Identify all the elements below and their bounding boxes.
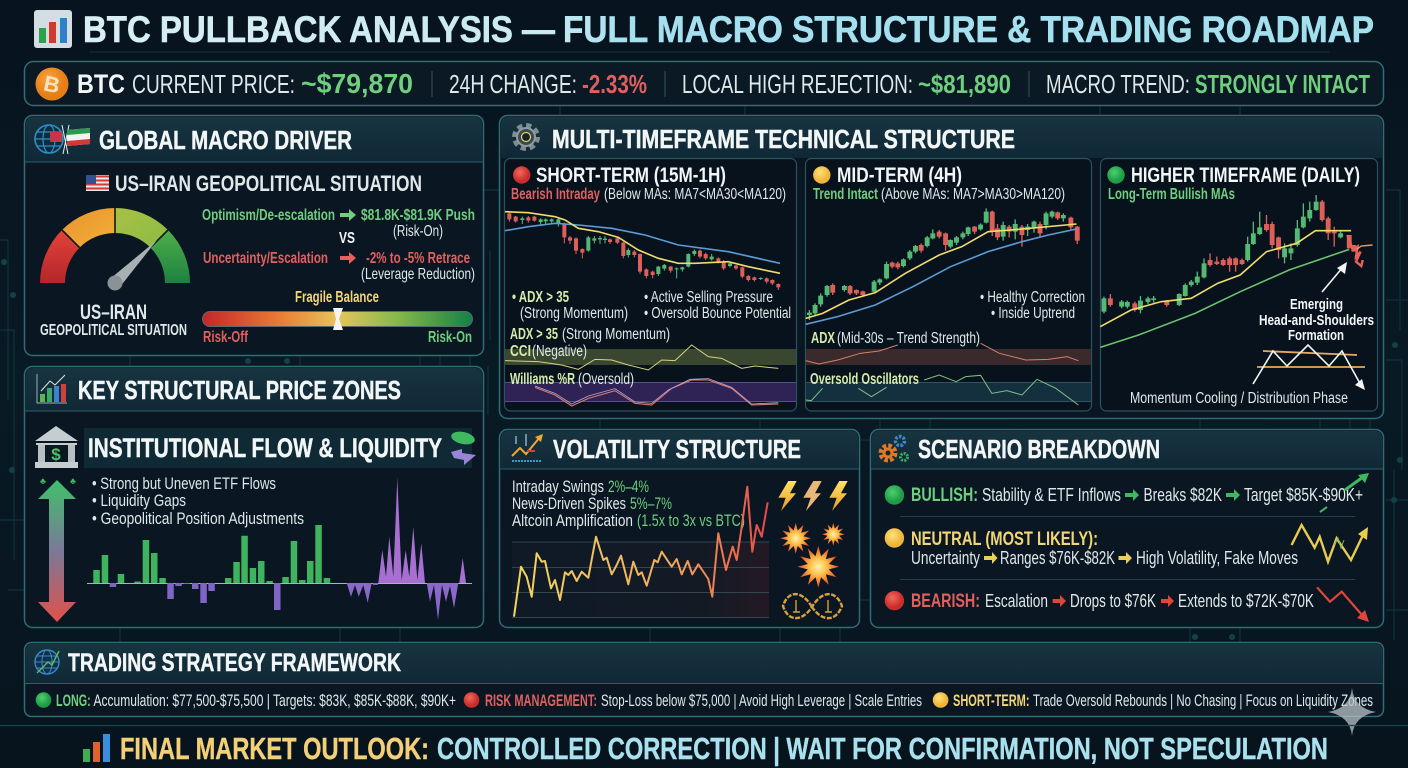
indicator: green dot — [1107, 166, 1125, 184]
scenario: neutral — [885, 525, 1368, 568]
icon: bar chart — [34, 10, 72, 48]
label: head and shoulders: Emerging — [1290, 296, 1343, 313]
caption: distribution: Momentum Cooling / Distribution Phase — [1130, 390, 1348, 407]
description: trend intact: (Above MAs: MA7>MA30>MA120) — [881, 186, 1065, 203]
risk-off scenario — [203, 250, 475, 283]
arrow: flow range: ♣ — [40, 476, 46, 486]
scenario: bullish: BULLISH: — [911, 485, 978, 506]
subheading: institutional flow: INSTITUTIONAL FLOW & LIQUIDITY — [88, 433, 442, 463]
risk balance bar — [202, 289, 472, 346]
subheading: us-iran: US–IRAN GEOPOLITICAL SITUATION — [115, 171, 422, 196]
scenario: bearish — [885, 587, 1369, 622]
panel: scenario breakdown — [870, 430, 1384, 628]
stats: volatility ranges: (1.5x to 3x vs BTC) — [637, 511, 745, 530]
risk-on scenario: Optimism/De-escalation — [202, 207, 335, 224]
scenario: bearish: Extends to $72K-$70K — [1178, 591, 1314, 611]
title: BTC PULLBACK ANALYSIS — — [83, 9, 555, 50]
notes: momentum: • ADX > 35 — [512, 289, 569, 306]
gauge — [40, 208, 190, 339]
label: head and shoulders: Head-and-Shoulders — [1259, 312, 1374, 329]
oscillators: short-term: ADX > 35 — [510, 326, 558, 343]
candlestick chart: mid-term — [806, 208, 1077, 324]
candlestick chart: short-term — [505, 212, 780, 290]
icon: altcoin amplification — [783, 594, 842, 618]
oscillators: short-term: CCI — [510, 343, 531, 360]
heading: mid-term: MID-TERM (4H) — [837, 164, 962, 187]
footer: final market outlook: FINAL MARKET OUTLOOK: — [120, 731, 429, 766]
bullet list: • Geopolitical Position Adjustments — [92, 509, 304, 528]
icon: bitcoin: B — [42, 71, 62, 98]
icon: gears — [881, 436, 908, 460]
bullet list: • Strong but Uneven ETF Flows — [92, 474, 276, 493]
indicator: yellow dot — [813, 166, 830, 184]
heading: volatility structure: VOLATILITY STRUCTURE — [553, 434, 801, 464]
description: trend intact: Trend Intact — [813, 186, 878, 203]
scenario: neutral: Ranges $76K-$82K — [1000, 548, 1115, 568]
sub-panel: short-term — [504, 158, 796, 411]
scenario: bearish: Drops to $76K — [1070, 591, 1156, 611]
risk balance bar: Risk-Off — [203, 329, 248, 346]
panel: multi-timeframe technical structure — [500, 116, 1384, 418]
icon: us flag — [86, 175, 109, 191]
strategy: long: LONG: — [56, 691, 91, 710]
icon: up arrow — [1320, 473, 1369, 512]
oscillators: short-term: Williams %R — [510, 371, 575, 388]
strategy: short-term: SHORT-TERM: — [953, 691, 1030, 710]
icon: bitcoin — [36, 68, 68, 100]
stats: volatility ranges: Intraday Swings — [512, 477, 604, 496]
icon: money exchange — [450, 430, 476, 465]
label: head and shoulders — [1259, 296, 1374, 344]
notes: momentum: (Strong Momentum) — [520, 305, 628, 322]
strategy: long — [36, 691, 456, 710]
icon: globe with trend — [35, 650, 59, 674]
scenario: bullish: Breaks $82K — [1144, 485, 1222, 505]
status bar: -2.33% — [582, 69, 647, 99]
description: trend intact — [813, 186, 1065, 203]
icon: globe and flags — [35, 125, 90, 154]
icon: bank building — [35, 426, 78, 468]
footer: final market outlook — [0, 726, 1408, 766]
status bar — [24, 62, 1384, 106]
scenario: neutral: Uncertainty — [911, 548, 980, 568]
icon: volatility chart — [512, 434, 543, 461]
strategy: long: Accumulation: $77,500-$75,500 | Targets: $83K, $85K-$88K, $90K+ — [94, 691, 456, 710]
scenario: bullish: Target $85K-$90K+ — [1244, 485, 1363, 505]
risk-off scenario: Uncertainty/Escalation — [203, 250, 328, 267]
notes: healthy correction — [980, 289, 1085, 322]
oscillators: short-term: (Negative) — [532, 343, 587, 360]
description: bearish intraday: Bearish Intraday — [511, 186, 600, 203]
panel: trading strategy framework — [24, 642, 1384, 716]
notes: healthy correction: • Healthy Correction — [980, 289, 1085, 306]
scenario: bullish: Stability & ETF Inflows — [982, 485, 1121, 505]
title — [34, 9, 1374, 50]
gauge: US–IRAN — [80, 301, 147, 324]
line chart: volatility — [512, 487, 769, 618]
heading: global macro driver: GLOBAL MACRO DRIVER — [99, 125, 352, 155]
scenario: bullish — [885, 473, 1369, 512]
strategy: risk management: RISK MANAGEMENT: — [485, 691, 597, 710]
status bar: 24H CHANGE: — [449, 69, 577, 99]
description: bearish intraday — [511, 186, 786, 203]
arrow: pattern pointer — [1322, 262, 1347, 292]
heading: short-term: SHORT-TERM (15M-1H) — [536, 164, 726, 187]
stats: volatility ranges: News-Driven Spikes — [512, 494, 626, 513]
bar chart: etf flows — [87, 477, 472, 620]
risk balance bar: Risk-On — [428, 329, 472, 346]
description: bullish MAs: Long-Term Bullish MAs — [1108, 186, 1235, 203]
heading: multi-timeframe: MULTI-TIMEFRAME TECHNICAL STRUCTURE — [552, 124, 1015, 154]
oscillators: mid-term — [806, 330, 1091, 405]
panel: key structural price zones — [24, 366, 484, 628]
strategy: risk management — [464, 691, 922, 710]
status bar: CURRENT PRICE: — [132, 69, 295, 99]
oscillators: mid-term: (Mid-30s – Trend Strength) — [837, 330, 980, 347]
scenario: bearish: Escalation — [985, 591, 1048, 611]
scenario: neutral: NEUTRAL (MOST LIKELY): — [911, 529, 1098, 550]
icon: bank building: $ — [51, 445, 61, 464]
bullet list — [92, 474, 304, 528]
scenario: bearish: BEARISH: — [911, 591, 980, 612]
arrow: flow range — [38, 476, 76, 622]
stats: volatility ranges: 2%–4% — [608, 477, 649, 496]
oscillators: mid-term: ADX — [811, 330, 835, 347]
risk-on scenario: (Risk-On) — [393, 223, 443, 240]
notes: pressure: • Active Selling Pressure — [644, 289, 773, 306]
heading: scenario breakdown: SCENARIO BREAKDOWN — [918, 434, 1160, 464]
watermark star — [1328, 688, 1376, 736]
panel: global macro driver — [24, 116, 484, 356]
risk balance bar: Fragile Balance — [295, 289, 379, 306]
sub-panel: higher timeframe — [1100, 158, 1378, 411]
status bar: BTC — [77, 69, 125, 99]
icon: explosions — [780, 523, 845, 588]
icon: outlook bars — [83, 734, 110, 762]
status bar: ~$81,890 — [918, 69, 1011, 99]
oscillators: short-term: (Oversold) — [578, 371, 634, 388]
arrow: flow range: ♣ — [70, 476, 76, 486]
oscillators: short-term — [505, 326, 796, 406]
bullet list: • Liquidity Gaps — [92, 491, 186, 510]
icon: down arrow — [1317, 587, 1369, 622]
scenario: neutral: High Volatility, Fake Moves — [1136, 548, 1298, 568]
icon: lightning bolts — [778, 481, 848, 511]
strategy: risk management: Stop-Loss below $75,000 | Avoid High Leverage | Scale Entries — [601, 691, 922, 710]
panel: volatility structure — [500, 430, 860, 628]
sub-panel: mid-term — [806, 158, 1092, 411]
notes: momentum — [512, 289, 628, 322]
stats: volatility ranges — [512, 477, 745, 530]
status bar: LOCAL HIGH REJECTION: — [682, 69, 913, 99]
notes: healthy correction: • Inside Uptrend — [991, 305, 1075, 322]
icon: rising bars — [37, 374, 67, 403]
oscillators: mid-term: Oversold Oscillators — [810, 371, 919, 388]
risk-off scenario: (Leverage Reduction) — [361, 266, 475, 283]
vs label: VS — [339, 230, 355, 247]
stats: volatility ranges: Altcoin Amplification — [512, 511, 633, 530]
indicator: red dot — [513, 166, 530, 184]
pattern: head and shoulders — [1253, 345, 1365, 390]
label: head and shoulders: Formation — [1288, 327, 1344, 344]
icon: gear — [515, 126, 537, 148]
risk-on scenario: $81.8K-$81.9K Push — [361, 207, 475, 224]
heading: trading strategy framework: TRADING STRATEGY FRAMEWORK — [68, 649, 401, 677]
status bar: ~$79,870 — [301, 68, 413, 99]
notes: pressure: • Oversold Bounce Potential — [644, 305, 791, 322]
description: bearish intraday: (Below MAs: MA7<MA30<MA120) — [604, 186, 786, 203]
stats: volatility ranges: 5%–7% — [630, 494, 672, 513]
gauge: GEOPOLITICAL SITUATION — [40, 322, 187, 339]
oscillators: short-term: (Strong Momentum) — [562, 326, 670, 343]
notes: pressure — [644, 289, 791, 322]
risk-off scenario: -2% to -5% Retrace — [366, 250, 470, 267]
icon: choppy arrow — [1292, 525, 1368, 562]
candlestick chart: daily — [1100, 195, 1373, 347]
heading: key structural price zones: KEY STRUCTURAL PRICE ZONES — [78, 375, 401, 405]
status bar: MACRO TREND: — [1046, 69, 1190, 99]
risk-on scenario — [202, 207, 475, 240]
